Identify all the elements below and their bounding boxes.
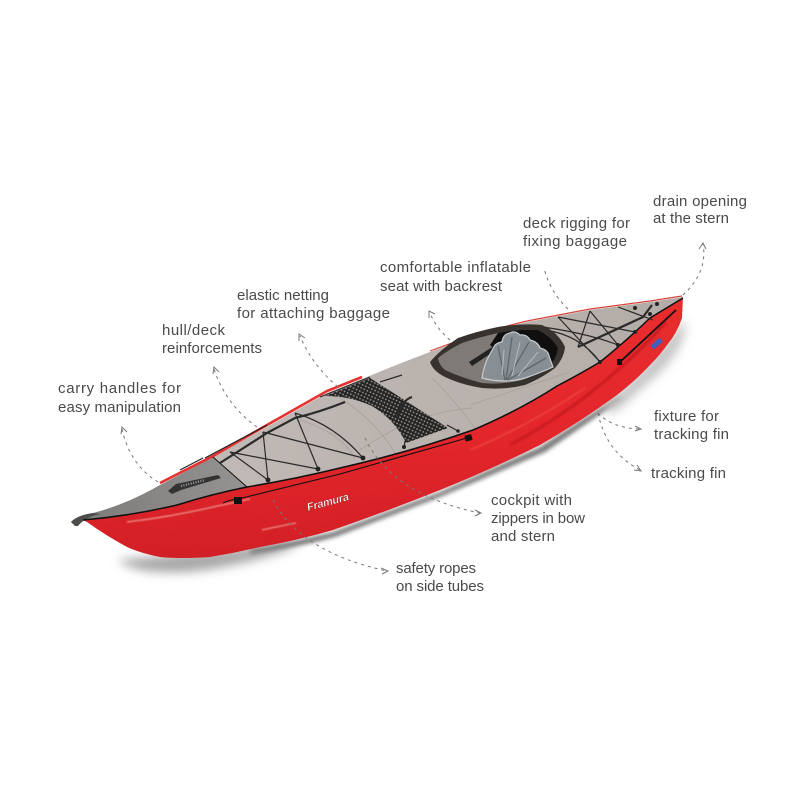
callout: elastic netting: for attaching baggage bbox=[237, 305, 390, 322]
callout: inflatable seat bbox=[380, 259, 531, 340]
bow tip and grey bow panel bbox=[71, 457, 247, 526]
cockpit interior bbox=[438, 330, 558, 384]
callout: deck rigging: fixing baggage bbox=[523, 233, 627, 250]
callout: cockpit zippers: cockpit with bbox=[491, 492, 572, 509]
callout: cockpit zippers: zippers in bow bbox=[491, 510, 585, 527]
deck bbox=[213, 297, 683, 487]
cockpit bbox=[430, 324, 565, 389]
bow panel divider bbox=[213, 457, 247, 487]
callout: tracking fin: tracking fin bbox=[651, 465, 726, 482]
callout: tracking fin fixture: tracking fin bbox=[654, 426, 729, 443]
deck fold lines bbox=[300, 372, 570, 460]
callout: carry handles bbox=[58, 380, 181, 482]
callout: safety ropes bbox=[273, 500, 484, 595]
deck seam bbox=[83, 298, 683, 520]
stern side rope bbox=[617, 310, 676, 365]
side rope bow bbox=[223, 434, 473, 504]
callout: inflatable seat: comfortable inflatable bbox=[380, 259, 531, 276]
callout: tracking fin bbox=[598, 413, 726, 482]
callout: drain opening: at the stern bbox=[653, 210, 729, 227]
callout: cockpit zippers bbox=[365, 438, 585, 545]
callout: cockpit zippers: and stern bbox=[491, 528, 555, 545]
callout: safety ropes: on side tubes bbox=[396, 578, 484, 595]
callout: safety ropes: safety ropes bbox=[396, 560, 476, 577]
stern deck straps bbox=[528, 302, 659, 364]
callout: hull/deck reinforcements: hull/deck bbox=[162, 322, 226, 339]
callout: deck rigging: deck rigging for bbox=[523, 215, 630, 232]
callout: carry handles: easy manipulation bbox=[58, 399, 181, 416]
net cords bbox=[320, 375, 460, 449]
blue badge bbox=[651, 338, 663, 350]
red hull bbox=[83, 297, 683, 558]
carry handle bbox=[168, 475, 221, 494]
callout: elastic netting: elastic netting bbox=[237, 287, 329, 304]
seat bbox=[482, 332, 553, 381]
callout: carry handles: carry handles for bbox=[58, 380, 181, 397]
cockpit rim bbox=[430, 324, 565, 389]
red gunwale bbox=[160, 377, 362, 483]
callout: drain opening: drain opening bbox=[653, 193, 747, 210]
callout: tracking fin fixture bbox=[598, 408, 729, 443]
callout: hull/deck reinforcements: reinforcements bbox=[162, 340, 262, 357]
callout: inflatable seat: seat with backrest bbox=[380, 278, 503, 295]
callout: hull/deck reinforcements bbox=[162, 322, 262, 427]
bow rope along gunwale bbox=[180, 425, 267, 470]
netting bbox=[325, 378, 448, 443]
hull highlights bbox=[127, 322, 666, 530]
backrest strap bbox=[469, 344, 499, 366]
bow deck straps bbox=[220, 402, 365, 482]
hull badge text: Framura bbox=[306, 491, 350, 514]
callout: elastic netting bbox=[237, 287, 390, 387]
kayak bbox=[71, 296, 685, 572]
callout: tracking fin fixture: fixture for bbox=[654, 408, 719, 425]
callout: drain opening bbox=[653, 193, 747, 295]
callout: deck rigging bbox=[523, 215, 630, 309]
hull shadow bbox=[118, 320, 685, 572]
